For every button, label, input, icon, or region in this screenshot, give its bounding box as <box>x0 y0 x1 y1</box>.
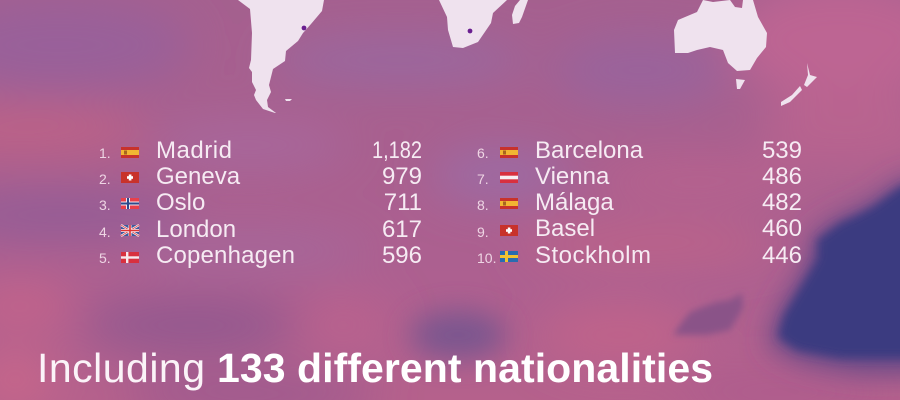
flag: United Kingdom <box>121 225 139 236</box>
small dark cloud centre <box>410 311 506 359</box>
row 2: Geneva: Geneva <box>156 163 241 190</box>
row 1: Madrid: 1,182 <box>372 137 422 164</box>
row 9: Basel: 460 <box>762 215 802 242</box>
row 4: London: London <box>156 216 236 243</box>
row 6: Barcelona <box>477 137 802 164</box>
row 2: Geneva: 979 <box>382 163 422 190</box>
row 9: Basel: Basel <box>535 215 595 242</box>
row 8: Málaga <box>477 189 802 216</box>
ranking list: right column <box>477 137 802 269</box>
flag: Spain <box>500 198 518 209</box>
flag: Sweden <box>500 251 518 262</box>
New Zealand <box>781 63 817 106</box>
row 9: Basel <box>477 215 802 242</box>
row 2: Geneva: 2. <box>99 171 111 187</box>
row 10: Stockholm: 446 <box>762 242 802 269</box>
row 3: Oslo: 711 <box>384 189 422 216</box>
flag: Spain <box>121 147 139 158</box>
flag: Norway <box>121 198 139 209</box>
row 7: Vienna <box>477 163 802 190</box>
Tasmania <box>736 79 745 89</box>
row 7: Vienna: 7. <box>477 171 489 187</box>
row 5: Copenhagen: Copenhagen <box>156 242 295 269</box>
row 8: Málaga: 482 <box>762 189 802 216</box>
flag: Switzerland <box>500 225 518 236</box>
headline: 133 different nationalities <box>217 345 713 391</box>
small cloud right of centre <box>673 293 743 335</box>
row 5: Copenhagen: 596 <box>382 242 422 269</box>
ranking list: left column <box>99 137 422 269</box>
row 4: London: 617 <box>382 216 422 243</box>
row 6: Barcelona: 539 <box>762 137 802 164</box>
flag: Switzerland <box>121 172 139 183</box>
row 5: Copenhagen <box>99 242 422 269</box>
row 3: Oslo: 3. <box>99 197 111 213</box>
row 5: Copenhagen: 5. <box>99 250 111 266</box>
flag: Austria <box>500 172 518 183</box>
Africa <box>439 0 507 48</box>
row 9: Basel: 9. <box>477 224 489 240</box>
row 4: London: 4. <box>99 224 111 240</box>
row 1: Madrid: 1. <box>99 145 111 161</box>
row 2: Geneva <box>99 163 422 190</box>
row 7: Vienna: Vienna <box>535 163 610 190</box>
flag: Denmark <box>121 252 139 263</box>
flag: Spain <box>500 147 518 158</box>
row 1: Madrid: Madrid <box>156 137 232 164</box>
location dot: South Africa <box>468 29 472 33</box>
row 10: Stockholm: 10. <box>477 250 496 266</box>
row 8: Málaga: 8. <box>477 197 489 213</box>
row 4: London <box>99 216 422 243</box>
South America <box>238 0 324 113</box>
row 10: Stockholm <box>477 242 802 269</box>
Madagascar <box>512 0 528 24</box>
world map fragment <box>238 0 817 113</box>
Australia <box>674 0 767 71</box>
row 3: Oslo <box>99 189 422 216</box>
row 8: Málaga: Málaga <box>535 189 614 216</box>
row 6: Barcelona: 6. <box>477 145 489 161</box>
large dark cloud <box>768 170 900 372</box>
row 7: Vienna: 486 <box>762 163 802 190</box>
location dot: Brazil <box>302 26 306 30</box>
headline: Including <box>37 345 205 391</box>
row 6: Barcelona: Barcelona <box>535 137 644 164</box>
row 3: Oslo: Oslo <box>156 189 205 216</box>
row 10: Stockholm: Stockholm <box>535 242 651 269</box>
row 1: Madrid <box>99 137 422 164</box>
